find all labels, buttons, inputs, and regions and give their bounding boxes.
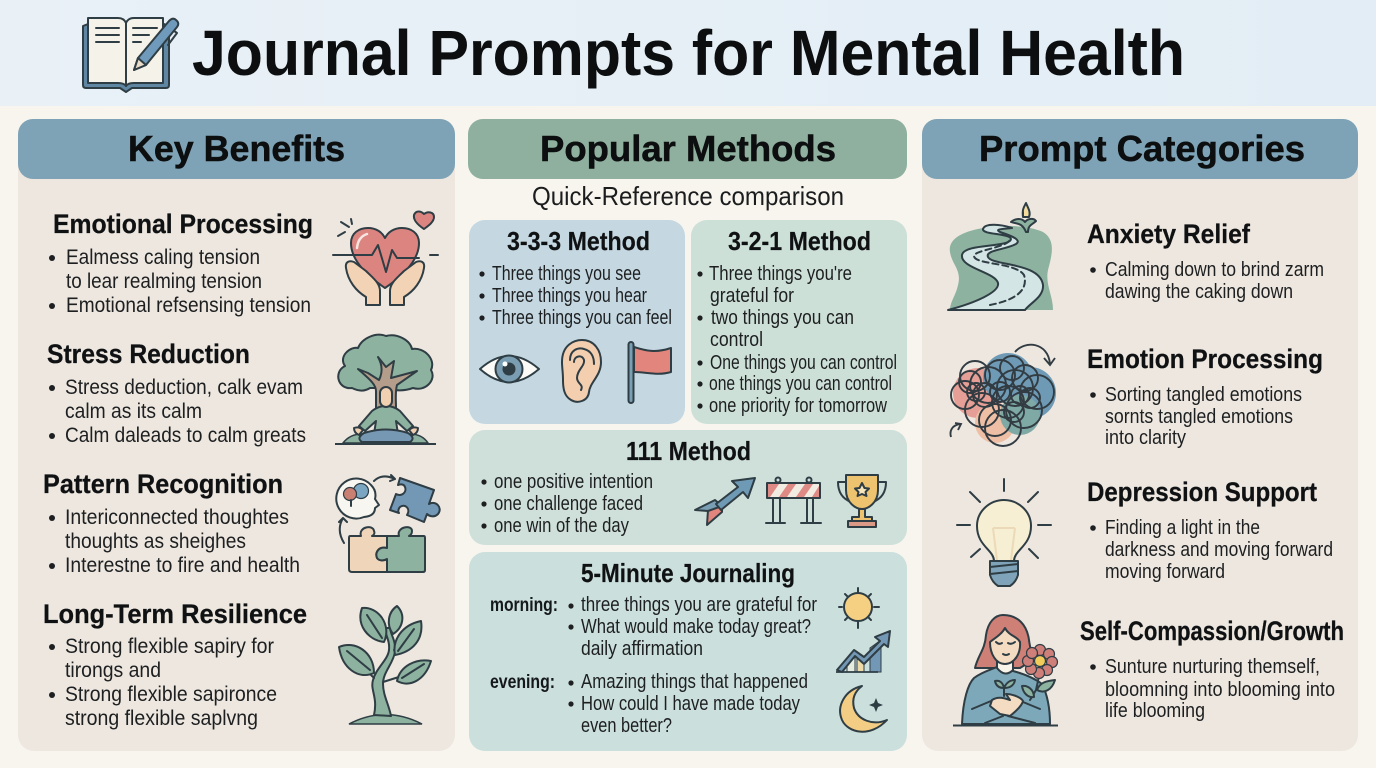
card: 111 method: one win of the day xyxy=(494,514,630,537)
heading: key benefits: Key Benefits xyxy=(128,128,345,169)
card: 3-3-3 method: Three things you can feel xyxy=(492,306,672,329)
category: anxiety relief: Anxiety Relief xyxy=(1087,219,1250,249)
benefit: pattern recognition: Intericonnected thoughtes xyxy=(65,505,289,529)
icon: meditating person under tree xyxy=(335,335,436,444)
icon: growing sapling xyxy=(339,606,431,724)
benefit: pattern recognition: thoughts as sheighes xyxy=(65,529,246,553)
icon: barrier xyxy=(766,478,821,523)
category: self-compassion and growth: life blooming xyxy=(1105,699,1205,722)
icon: woman with flower xyxy=(953,615,1058,726)
card: 5-minute journaling: daily affirmation xyxy=(581,637,703,660)
benefit: long-term resilience: strong flexible saplvng xyxy=(65,706,258,730)
icon: winding path xyxy=(948,203,1053,310)
card: 3-2-1 method: one priority for tomorrow xyxy=(709,394,887,417)
benefit: emotional processing: Ealmess caling tension xyxy=(66,245,260,269)
category: emotion processing: sornts tangled emotions xyxy=(1105,405,1293,428)
card: 5-minute journaling: even better? xyxy=(581,714,672,737)
icon: light bulb xyxy=(957,479,1051,586)
category: depression support: Finding a light in the xyxy=(1105,516,1260,539)
category: anxiety relief: dawing the caking down xyxy=(1105,280,1293,303)
icon: open journal with pen xyxy=(83,18,178,92)
icon: growth chart xyxy=(836,631,890,672)
category: anxiety relief xyxy=(1087,219,1324,303)
icon: tangled thoughts xyxy=(950,345,1056,446)
benefit: stress reduction: Stress deduction, calk evam xyxy=(65,375,303,399)
benefit: pattern recognition xyxy=(43,469,300,577)
card: 3-2-1 method: Three things you're xyxy=(709,262,852,285)
card: 3-3-3 method xyxy=(469,220,685,424)
icon: trophy xyxy=(838,475,886,527)
card: 3-3-3 method: Three things you hear xyxy=(492,284,647,307)
category: self-compassion and growth: bloomning into blooming into xyxy=(1105,678,1335,701)
heading: popular methods: Popular Methods xyxy=(540,128,836,169)
panel: key benefits xyxy=(18,119,455,751)
card: 3-2-1 method: 3-2-1 Method xyxy=(728,226,871,256)
benefit: pattern recognition: Pattern Recognition xyxy=(43,469,283,499)
benefit: emotional processing: Emotional Processing xyxy=(53,209,313,239)
icon: brain and puzzle pieces xyxy=(336,475,440,572)
title: Journal Prompts for Mental Health xyxy=(192,17,1185,89)
benefit: stress reduction: Calm daleads to calm greats xyxy=(65,423,306,447)
card: 5-minute journaling: What would make today great? xyxy=(581,615,811,638)
category: emotion processing: Emotion Processing xyxy=(1087,344,1323,374)
heading: prompt categories: Prompt Categories xyxy=(979,128,1305,169)
benefit: long-term resilience: Long-Term Resilience xyxy=(43,599,307,629)
card: 111 method: one challenge faced xyxy=(494,492,643,515)
benefit: stress reduction: calm as its calm xyxy=(65,399,202,423)
card: 3-2-1 method: grateful for xyxy=(710,284,794,307)
panel: prompt categories xyxy=(922,119,1358,751)
icon: ear xyxy=(562,340,601,402)
panel: popular methods xyxy=(468,119,907,751)
benefit: long-term resilience: Strong flexible sapiry for xyxy=(65,634,274,658)
category: self-compassion and growth xyxy=(1080,616,1344,722)
card: 5-minute journaling: three things you are grateful for xyxy=(581,593,817,616)
benefit: long-term resilience: Strong flexible sapironce xyxy=(65,682,277,706)
card: 3-3-3 method: 3-3-3 Method xyxy=(507,226,650,256)
icon: crescent moon xyxy=(840,686,887,732)
card: 111 method: 111 Method xyxy=(626,436,751,466)
benefit: emotional processing xyxy=(49,209,313,317)
icon: sun xyxy=(839,588,879,628)
category: depression support xyxy=(1087,477,1333,583)
icon: eye xyxy=(480,356,539,382)
benefit: pattern recognition: Interestne to fire and health xyxy=(65,553,300,577)
category: self-compassion and growth: Sunture nurturing themself, xyxy=(1105,655,1320,678)
card: 5-minute journaling: How could I have made today xyxy=(581,692,801,715)
card: 111 method: one positive intention xyxy=(494,470,653,493)
benefit: long-term resilience: tirongs and xyxy=(65,658,161,682)
benefit: emotional processing: Emotional refsensing tension xyxy=(66,293,311,317)
card: 3-2-1 method: one things you can control xyxy=(709,372,892,395)
icon: flag xyxy=(628,342,671,403)
icon: heart in hands xyxy=(333,212,438,305)
header banner xyxy=(0,0,1376,106)
card: 5-minute journaling: morning: xyxy=(490,595,558,616)
category: depression support: darkness and moving forward xyxy=(1105,538,1333,561)
card: 3-2-1 method: control xyxy=(710,328,763,351)
card: 3-2-1 method: two things you can xyxy=(711,306,854,329)
card: 5-minute journaling: Amazing things that happened xyxy=(581,670,808,693)
category: depression support: moving forward xyxy=(1105,560,1225,583)
category: emotion processing: Sorting tangled emotions xyxy=(1105,383,1302,406)
category: depression support: Depression Support xyxy=(1087,477,1317,507)
category: emotion processing: into clarity xyxy=(1105,426,1187,449)
card: 3-2-1 method: One things you can control xyxy=(710,351,897,374)
subheading: Quick-Reference comparison xyxy=(532,181,844,211)
card: 5-minute journaling: evening: xyxy=(490,672,555,693)
card: 3-2-1 method xyxy=(691,220,907,424)
category: anxiety relief: Calming down to brind zarm xyxy=(1105,258,1324,281)
benefit: long-term resilience xyxy=(43,599,307,730)
card: 5-minute journaling: 5-Minute Journaling xyxy=(581,558,795,588)
card: 5-minute journaling xyxy=(469,552,907,751)
category: emotion processing xyxy=(1087,344,1323,449)
card: 111 method xyxy=(469,430,907,545)
benefit: emotional processing: to lear realming tension xyxy=(66,269,262,293)
benefit: stress reduction: Stress Reduction xyxy=(47,339,250,369)
icon: arrow xyxy=(695,478,755,525)
card: 3-3-3 method: Three things you see xyxy=(492,262,641,285)
benefit: stress reduction xyxy=(47,339,306,447)
